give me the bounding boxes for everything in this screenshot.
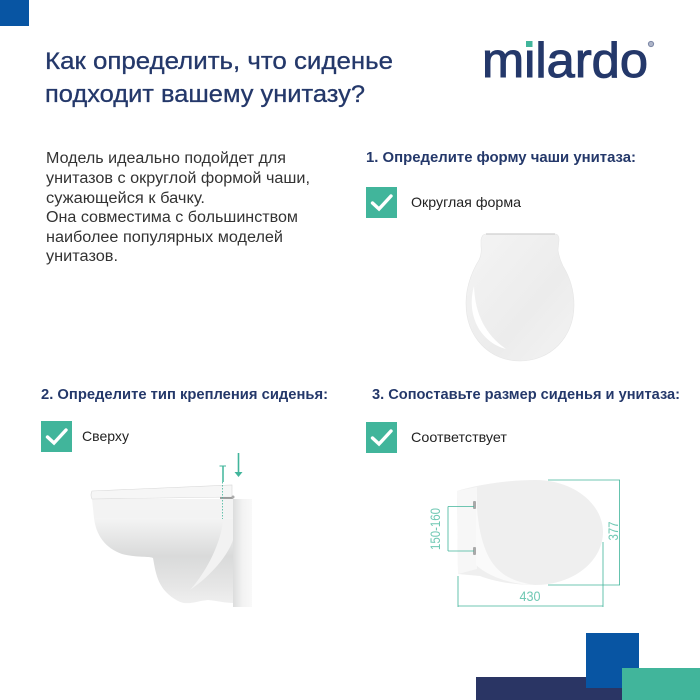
icon: check 1 [366,187,397,218]
panel: step 2 mount type [41,387,328,607]
intro text block: унитазов с округлой формой чаши, [46,170,310,187]
intro text block: наиболее популярных моделей [46,229,283,246]
corner square [0,0,29,26]
seat dimension drawing [457,480,603,585]
dimension labels [427,508,621,604]
intro text block: Она совместима с большинством [46,209,298,226]
label: from above: Сверху [82,428,129,444]
arrow: down [234,453,242,477]
panel: step 1 bowl shape [366,150,636,361]
toilet side view [91,485,252,607]
decorative corner blocks [476,633,700,700]
intro text block: унитазов. [46,248,118,265]
title [45,48,393,108]
intro text block: сужающейся к бачку. [46,190,205,207]
intro text block: Модель идеально подойдет для [46,150,286,167]
heading: step 2: 2. Определите тип крепления сиденья: [41,387,328,403]
icon: check 2 [41,421,72,452]
dimension lines [448,480,620,607]
logo: milardo: milardo [482,34,648,88]
dimension labels: 377 [605,521,621,540]
icon: check 3 [366,422,397,453]
dimension labels: 150-160 [427,508,443,550]
toilet seat top view [466,234,574,361]
panel: step 3 size [366,387,680,607]
dimension labels: 430 [520,588,541,604]
heading: step 1: 1. Определите форму чаши унитаза: [366,150,636,166]
marker: hole line [220,466,226,519]
label: round shape: Округлая форма [411,194,521,210]
heading: step 3: 3. Сопоставьте размер сиденья и унитаза: [372,387,680,403]
title: подходит вашему унитазу? [45,81,365,108]
title: Как определить, что сиденье [45,48,393,75]
intro text block [46,150,310,265]
label: matches: Соответствует [411,429,508,445]
